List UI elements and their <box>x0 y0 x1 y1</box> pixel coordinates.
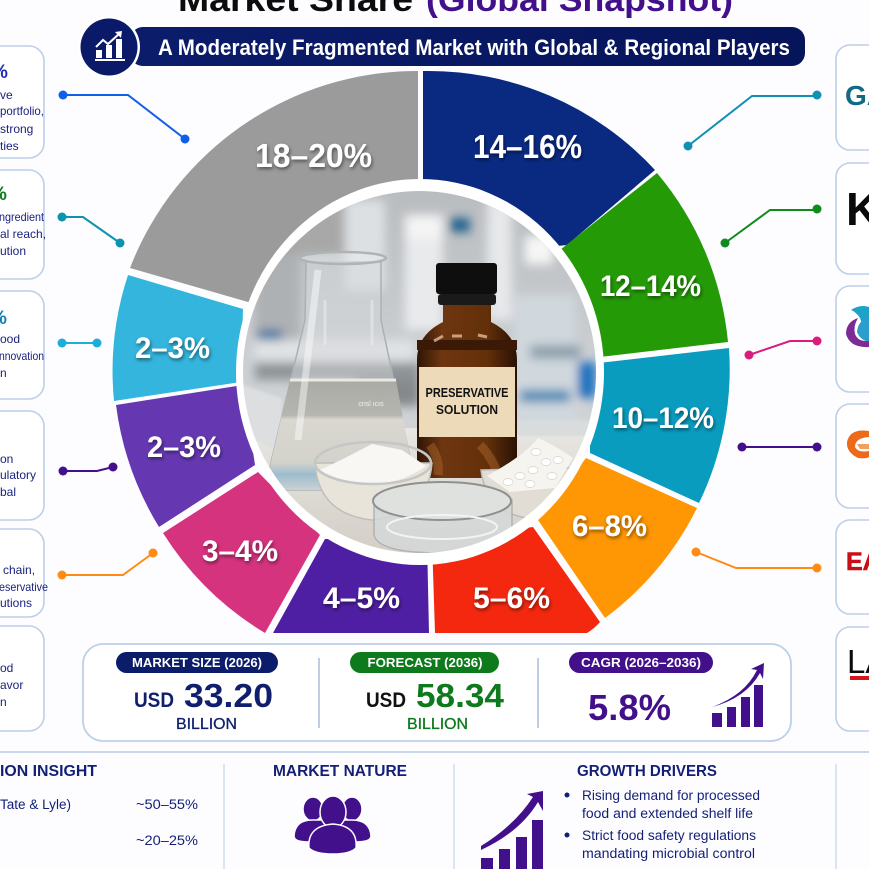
segment: 10–12% <box>590 348 730 503</box>
growth drivers: mandating microbial control <box>582 846 755 861</box>
card 3: nnovation <box>0 349 44 363</box>
left bowl with powder <box>315 442 432 520</box>
card 1: ties <box>0 139 19 153</box>
white tray <box>243 385 282 448</box>
metric: CAGR: CAGR (2026–2036) <box>581 655 701 670</box>
market nature: MARKET NATURE <box>273 763 407 780</box>
concentration insight: Tate & Lyle) <box>0 797 71 812</box>
percentage labels: 12–14% <box>600 270 701 303</box>
icon: rising bars <box>481 791 543 869</box>
card: LA logo <box>836 627 869 731</box>
card 2: ngredient <box>0 210 45 224</box>
metric: forecast: 58.34 <box>416 677 505 714</box>
card 2 <box>0 170 46 279</box>
segment: 6–8% <box>538 458 697 618</box>
metric: CAGR: 5.8% <box>588 687 671 728</box>
segment: 5–6% <box>432 527 600 633</box>
percentage labels: 5–6% <box>473 582 550 615</box>
right company cards <box>836 45 869 731</box>
segment: 18–20% <box>130 71 418 302</box>
card 5: chain, <box>3 563 35 577</box>
percentage labels: 14–16% <box>473 128 582 165</box>
concentration insight: ~50–55% <box>136 797 198 812</box>
flask: cnsl ıcıs <box>358 401 384 408</box>
metric: forecast: FORECAST (2036) <box>368 655 482 670</box>
card 1 <box>0 46 44 158</box>
flask <box>270 252 412 490</box>
card: swirl logo <box>836 286 869 392</box>
card 1: portfolio, <box>0 104 44 118</box>
card 1: strong <box>0 122 33 136</box>
concentration insight: ION INSIGHT <box>0 763 98 780</box>
growth drivers <box>481 763 760 869</box>
card 6: n <box>0 695 7 709</box>
card 6: avor <box>0 678 23 692</box>
percentage labels: 18–20% <box>255 137 372 174</box>
card 4 <box>0 411 44 520</box>
market metrics panel <box>83 644 791 741</box>
card 6: od <box>0 661 13 675</box>
metric: market size: MARKET SIZE (2026) <box>132 655 262 670</box>
segment: 12–14% <box>560 173 728 357</box>
card 3: n <box>0 366 7 380</box>
card 5: eservative <box>0 580 48 594</box>
percentage labels: 3–4% <box>202 535 278 568</box>
icon: rising bars <box>712 663 764 727</box>
segment: 4–5% <box>273 539 429 633</box>
metric: forecast <box>350 652 505 733</box>
growth drivers: food and extended shelf life <box>582 806 753 821</box>
bottle label: SOLUTION <box>436 403 498 417</box>
card 1: ve <box>0 88 13 102</box>
icon: growth chart badge <box>78 16 140 78</box>
bottle label: PRESERVATIVE <box>426 386 508 400</box>
left company cards <box>0 46 48 731</box>
percentage labels: 4–5% <box>323 582 400 615</box>
donut chart <box>113 71 730 633</box>
segment: 2–3% cyan <box>113 275 243 401</box>
metric: market size <box>116 652 278 733</box>
card 4: on <box>0 452 13 466</box>
metric: CAGR <box>569 652 764 728</box>
concentration insight: ~20–25% <box>136 833 198 848</box>
card: K logo <box>836 163 869 274</box>
bottle label <box>419 367 515 437</box>
growth drivers: Rising demand for processed <box>582 788 760 803</box>
percentage labels: 10–12% <box>612 402 714 435</box>
growth drivers: GROWTH DRIVERS <box>577 763 717 780</box>
card 3 <box>0 291 44 399</box>
card 4: ulatory <box>0 468 36 482</box>
percentage labels: 6–8% <box>572 510 647 543</box>
metric: market size: 33.20 <box>184 677 273 714</box>
card: GA logo <box>836 45 869 150</box>
segment: 14–16% <box>423 71 655 260</box>
subtitle banner: A Moderately Fragmented Market with Global & Regional Players <box>158 35 790 60</box>
table <box>256 428 584 553</box>
card 2: al reach, <box>0 227 46 241</box>
segment: 3–4% <box>163 472 320 633</box>
percentage labels: 2–3% <box>147 431 221 464</box>
right bowl with granules <box>481 438 573 518</box>
concentration insight <box>0 763 198 848</box>
segment: 2–3% violet <box>116 385 255 527</box>
icon: people <box>294 796 371 854</box>
card 5 <box>0 529 48 617</box>
metric: forecast: USD <box>366 689 406 712</box>
blurred lab background <box>250 196 596 418</box>
metric: market size: BILLION <box>176 716 237 733</box>
card 3: ood <box>0 332 20 346</box>
percentage labels <box>135 128 714 615</box>
market nature <box>273 763 407 854</box>
front glass dish <box>373 482 512 553</box>
metric: forecast: BILLION <box>407 716 468 733</box>
bottom section <box>0 752 869 869</box>
card: EA logo <box>836 520 869 614</box>
title <box>178 0 733 19</box>
central photo <box>240 190 600 560</box>
amber bottle <box>417 263 517 478</box>
subtitle banner <box>78 16 805 78</box>
card 6 <box>0 626 44 731</box>
card: orange swirl logo <box>836 404 869 508</box>
card 5: utions <box>0 596 32 610</box>
card 4: bal <box>0 485 16 499</box>
growth drivers: Strict food safety regulations <box>582 828 756 843</box>
card 2: ution <box>0 244 26 258</box>
connector lines <box>58 90 822 580</box>
metric: market size: USD <box>134 689 174 712</box>
percentage labels: 2–3% <box>135 332 210 365</box>
